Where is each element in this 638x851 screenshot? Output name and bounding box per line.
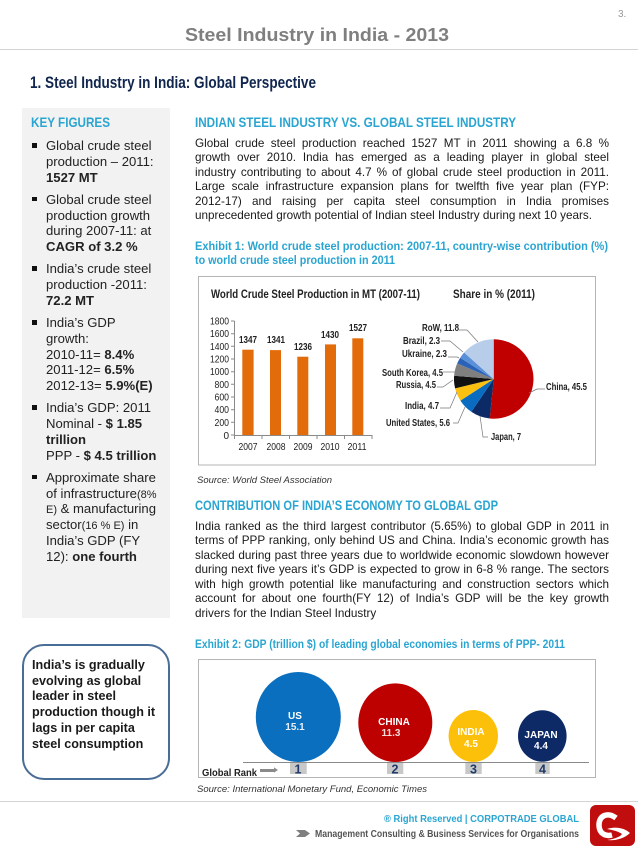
text block: key figures list: India’s GDP bbox=[46, 315, 116, 330]
text block: key figures list: 2010-11= 8.4% bbox=[46, 346, 134, 362]
paragraph: steel industry: unprecedented growth potential of Indian steel Industry during next 10 years. bbox=[195, 209, 592, 222]
paragraph: steel industry: Global crude steel production reached 1527 MT in 2011 showing a 6.8 % bbox=[195, 137, 609, 150]
rank boxes: 1 bbox=[295, 762, 302, 776]
bar chart: 1600 bbox=[210, 329, 229, 340]
bar chart: 2008 bbox=[266, 442, 286, 453]
bubble: China bbox=[358, 683, 432, 762]
exhibit 1 heading bbox=[195, 239, 608, 267]
paragraph: steel industry: industry contributing to about 4.7 % of global crude steel production in 2011. bbox=[195, 166, 609, 179]
bar chart: 400 bbox=[214, 405, 229, 416]
rank boxes: 2 bbox=[392, 762, 399, 776]
bubble: India: 4.5 bbox=[464, 739, 478, 750]
callout: leader in steel bbox=[32, 689, 116, 703]
paragraph: steel industry: 2012-17) and raising per capita steel consumption in India promises bbox=[195, 195, 609, 208]
bubble: US: 15.1 bbox=[285, 722, 305, 733]
chart title: share: Share in % (2011) bbox=[453, 289, 535, 301]
paragraph: steel industry: growth over 2010. India has emerged as a leading player in global steel bbox=[195, 151, 609, 164]
bubble: India bbox=[449, 710, 498, 762]
bar chart: 200 bbox=[214, 418, 229, 429]
pie chart: United States, 5.6 bbox=[386, 418, 450, 429]
paragraph: steel industry: Large scale infrastructure expansion plans for twelfth five year plan (FYP: bbox=[195, 180, 609, 193]
rank boxes bbox=[290, 762, 550, 776]
bubble: Japan: 4.4 bbox=[534, 741, 548, 752]
paragraph: contribution to GDP: during next five years it’s GDP is expected to grow in 6-8 % range. The sectors bbox=[195, 563, 609, 576]
callout: production though it bbox=[32, 705, 155, 719]
bar chart bbox=[210, 316, 372, 453]
bubble: US: US bbox=[288, 711, 302, 722]
text block: key figures list: India’s crude steel bbox=[46, 261, 151, 276]
exhibit 2 frame bbox=[198, 660, 596, 778]
callout bbox=[22, 644, 170, 780]
bar chart: 2009 bbox=[294, 442, 313, 453]
rank boxes: 4 bbox=[539, 762, 546, 776]
bar chart: 800 bbox=[214, 380, 229, 391]
bar chart: 2007 bbox=[238, 442, 258, 453]
bar chart: 2010 bbox=[320, 442, 340, 453]
paragraph: contribution to GDP: drivers for the Indian Steel Industry bbox=[195, 607, 376, 620]
bar chart: 1400 bbox=[210, 342, 229, 353]
heading: Indian vs global steel: INDIAN STEEL INDUSTRY VS. GLOBAL STEEL INDUSTRY bbox=[195, 114, 517, 130]
sidebar background: key figures bbox=[22, 108, 170, 618]
paragraph: steel industry bbox=[195, 137, 609, 222]
callout: India’s is gradually bbox=[32, 658, 145, 672]
icon: rank arrow bbox=[260, 767, 278, 773]
bar chart: 600 bbox=[214, 392, 229, 404]
text block: key figures list: sector(16 % E) in bbox=[46, 517, 138, 532]
text block: key figures list: Global crude steel bbox=[46, 138, 152, 153]
section heading: 1. Steel Industry in India: Global Perspective bbox=[30, 74, 316, 92]
text block: key figures list: trillion bbox=[46, 432, 86, 447]
text block: key figures list: 1527 MT bbox=[46, 170, 98, 184]
pie chart: India, 4.7 bbox=[405, 401, 439, 412]
logo bbox=[590, 805, 635, 846]
text block: key figures list: India’s GDP (FY bbox=[46, 533, 140, 548]
text block: key figures list: PPP - $ 4.5 trillion bbox=[46, 448, 156, 462]
bubble: Japan bbox=[518, 710, 567, 762]
paragraph: contribution to GDP: with high growth potential like manufacturing and construction sectors which bbox=[195, 578, 609, 591]
text block: key figures list: of infrastructure(8% bbox=[46, 486, 157, 500]
pie chart: Russia, 4.5 bbox=[396, 380, 436, 391]
exhibit 1 heading: to world crude steel production in 2011 bbox=[195, 253, 395, 267]
paragraph: contribution to GDP: account for about one fourth(FY 12) of India’s GDP will be the key growth bbox=[195, 592, 609, 605]
footer rights line: ® Right Reserved | CORPOTRADE GLOBAL bbox=[384, 814, 579, 825]
text block: key figures list bbox=[32, 138, 157, 564]
text block: key figures list: 72.2 MT bbox=[46, 293, 94, 308]
exhibit 2 heading: Exhibit 2: GDP (trillion $) of leading global economies in terms of PPP- 2011 bbox=[195, 637, 565, 651]
bar chart: 1430 bbox=[321, 330, 339, 341]
callout: lags in per capita bbox=[32, 721, 135, 735]
callout: steel consumption bbox=[32, 737, 143, 751]
paragraph: contribution to GDP bbox=[195, 520, 609, 620]
callout: evolving as global bbox=[32, 674, 141, 688]
pie chart: South Korea, 4.5 bbox=[382, 368, 443, 379]
text block: key figures list: 12): one fourth bbox=[46, 548, 137, 564]
global rank label: Global Rank bbox=[202, 768, 257, 779]
bar chart: 1347 bbox=[239, 335, 257, 346]
text block: key figures list: production growth bbox=[46, 208, 150, 222]
pie chart: China, 45.5 bbox=[546, 382, 587, 393]
text block: key figures list: India’s GDP: 2011 bbox=[46, 400, 151, 415]
footer rule bbox=[0, 801, 638, 802]
bar chart: 1527 bbox=[349, 323, 367, 334]
header rule bbox=[0, 49, 638, 50]
pie chart: Ukraine, 2.3 bbox=[402, 349, 447, 360]
bubble chart bbox=[202, 672, 589, 779]
title: Steel Industry in India - 2013 bbox=[185, 24, 449, 45]
bubble: China: CHINA bbox=[378, 717, 410, 728]
pie chart: RoW, 11.8 bbox=[422, 323, 459, 334]
bubble: Japan: JAPAN bbox=[524, 730, 558, 741]
text block: key figures list: 2011-12= 6.5% bbox=[46, 362, 134, 377]
bar chart: 1341 bbox=[267, 335, 285, 346]
text block: key figures list: Global crude steel bbox=[46, 192, 152, 207]
bar chart: 1000 bbox=[210, 367, 229, 378]
bar chart: 1800 bbox=[210, 316, 229, 328]
page number: 3. bbox=[618, 9, 626, 20]
pie chart: Japan, 7 bbox=[491, 432, 521, 443]
icon: footer chevron bbox=[296, 830, 310, 837]
bubble: US bbox=[256, 672, 341, 762]
text block: key figures list: production -2011: bbox=[46, 277, 147, 292]
text block: key figures list: E) & manufacturing bbox=[46, 501, 156, 516]
bar chart: 2011 bbox=[348, 442, 367, 453]
bubble: India: INDIA bbox=[457, 727, 485, 738]
paragraph: contribution to GDP: terms of PPP ranking, only behind US and China. India’s economic growth has bbox=[195, 534, 609, 547]
text block: key figures list: growth: bbox=[46, 331, 89, 346]
exhibit 1 chart frame bbox=[198, 276, 596, 465]
bar chart: 1200 bbox=[210, 354, 229, 366]
chart title: production: World Crude Steel Production in MT (2007-11) bbox=[211, 289, 420, 301]
bubble: China: 11.3 bbox=[382, 728, 401, 739]
text block: key figures list: during 2007-11: at bbox=[46, 223, 151, 238]
text block: key figures list: Nominal - $ 1.85 bbox=[46, 416, 142, 431]
footer tagline: Management Consulting & Business Services for Organisations bbox=[315, 828, 579, 840]
source: exhibit 1: Source: World Steel Association bbox=[197, 475, 332, 486]
bar chart: 1236 bbox=[294, 342, 312, 353]
paragraph: contribution to GDP: slacked during past three years due to worldwide economic slowdown however bbox=[195, 549, 609, 562]
exhibit 1 heading: Exhibit 1: World crude steel production: 2007-11, country-wise contribution (%) bbox=[195, 239, 608, 253]
source: exhibit 2: Source: International Monetary Fund, Economic Times bbox=[197, 784, 427, 795]
pie chart bbox=[382, 323, 587, 443]
heading: contribution to GDP: CONTRIBUTION OF INDIA’S ECONOMY TO GLOBAL GDP bbox=[195, 497, 498, 513]
rank boxes: 3 bbox=[470, 762, 477, 776]
text block: key figures list: 2012-13= 5.9%(E) bbox=[46, 378, 153, 393]
text block: key figures list: production – 2011: bbox=[46, 154, 154, 169]
heading: key figures: KEY FIGURES bbox=[31, 114, 110, 130]
pie chart: Brazil, 2.3 bbox=[403, 336, 440, 347]
paragraph: contribution to GDP: India ranked as the third largest contributor (5.65%) to global GDP in 2011 in bbox=[195, 520, 609, 533]
text block: key figures list: Approximate share bbox=[46, 470, 156, 485]
bar chart: 0 bbox=[223, 431, 229, 442]
text block: key figures list: CAGR of 3.2 % bbox=[46, 239, 138, 254]
